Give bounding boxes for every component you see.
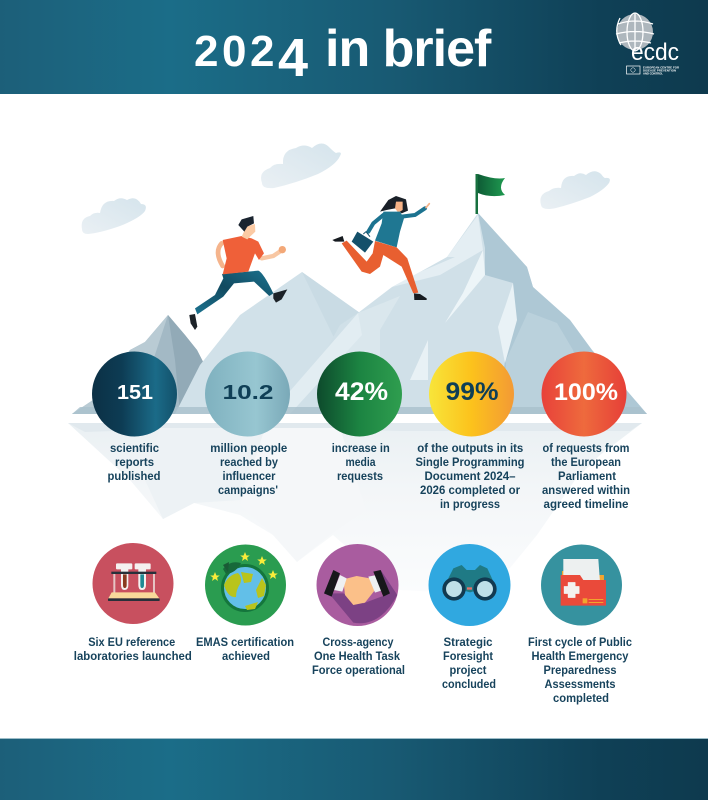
stat: 42% increase in media requests bbox=[317, 352, 402, 483]
mountain: main peak bbox=[270, 213, 647, 414]
caption bbox=[312, 637, 405, 677]
stat: 100% Parliament requests: 100% bbox=[554, 379, 618, 406]
icon: handshake bbox=[316, 544, 398, 626]
caption: Foresight bbox=[443, 651, 493, 663]
stat: 151 scientific reports published: published bbox=[108, 471, 160, 483]
stat: 100% Parliament requests: the European bbox=[551, 457, 621, 469]
stat: 99% outputs bbox=[416, 352, 524, 511]
caption: completed bbox=[553, 693, 609, 705]
achievement: Preparedness Assessments bbox=[528, 544, 633, 705]
ECDC logo bbox=[616, 13, 679, 76]
stat: 10.2 million people: 10.2 bbox=[222, 382, 274, 404]
stat: 99% outputs: in progress bbox=[440, 499, 500, 511]
caption: One Health Task bbox=[314, 651, 401, 663]
achievement: One Health Task Force bbox=[312, 544, 405, 677]
flag bbox=[476, 174, 505, 214]
stat: 99% outputs: of the outputs in its bbox=[417, 443, 523, 455]
ground shadow line bbox=[72, 407, 647, 414]
stat: 10.2 million people: million people bbox=[210, 443, 287, 455]
caption: Assessments bbox=[544, 679, 616, 691]
title: 202 bbox=[194, 27, 278, 76]
achievement: EMAS certification bbox=[196, 544, 294, 663]
stat: 10.2 million people: influencer bbox=[222, 471, 276, 483]
stat: 10.2 million people: reached by bbox=[220, 457, 279, 469]
stat: 151 scientific reports published: reports bbox=[115, 457, 154, 469]
stat: 100% Parliament requests: agreed timeline bbox=[544, 499, 628, 511]
caption: Cross-agency bbox=[322, 637, 394, 649]
ECDC logo: DISEASE PREVENTION bbox=[643, 68, 676, 72]
mountain: middle peak bbox=[175, 272, 400, 414]
stat: 99% outputs: 99% bbox=[446, 378, 498, 406]
stat: 100% Parliament requests: answered within bbox=[542, 485, 630, 497]
caption bbox=[528, 637, 633, 705]
stat: 42% increase in media requests: requests bbox=[337, 471, 383, 483]
caption: Strategic bbox=[444, 637, 493, 649]
cloud: right bbox=[540, 171, 610, 209]
icon: medical folder bbox=[541, 544, 622, 626]
header band bbox=[0, 0, 708, 94]
stat: 151 scientific reports published: 151 bbox=[117, 382, 153, 404]
stat: 99% outputs: Document 2024– bbox=[424, 471, 516, 483]
icon: globe with stars bbox=[205, 544, 286, 626]
icon: test tubes bbox=[92, 543, 174, 624]
stat: 42% increase in media requests: media bbox=[346, 457, 376, 469]
caption: laboratories launched bbox=[74, 651, 192, 663]
stat: 10.2 million people: campaigns' bbox=[218, 485, 278, 497]
caption bbox=[442, 637, 496, 691]
caption: project bbox=[450, 665, 487, 677]
title: in brief bbox=[325, 20, 492, 78]
ECDC logo: AND CONTROL bbox=[643, 72, 663, 76]
caption: achieved bbox=[222, 651, 270, 663]
cloud: left bbox=[82, 198, 146, 234]
ECDC logo: EUROPEAN CENTRE FOR bbox=[643, 66, 679, 70]
stat: 42% increase in media requests: increase in bbox=[332, 443, 390, 455]
caption: concluded bbox=[442, 679, 496, 691]
caption: Preparedness bbox=[544, 665, 616, 677]
stat: 99% outputs: Single Programming bbox=[416, 457, 524, 469]
achievement: Strategic Foresight bbox=[428, 544, 510, 691]
stat: 151 scientific reports published: scientific bbox=[110, 443, 160, 455]
caption bbox=[196, 637, 294, 663]
icon: binoculars bbox=[428, 544, 510, 626]
cloud: centre bbox=[261, 144, 341, 188]
caption: First cycle of Public bbox=[528, 637, 633, 649]
mountain reflection bbox=[68, 423, 642, 592]
caption: Health Emergency bbox=[532, 651, 629, 663]
mountain: small left peak bbox=[72, 315, 232, 414]
caption: EMAS certification bbox=[196, 637, 294, 649]
stat: 100% Parliament requests bbox=[542, 352, 630, 511]
stat: 99% outputs: 2026 completed or bbox=[420, 485, 521, 497]
stat: 10.2 million people bbox=[205, 352, 290, 497]
mountains bbox=[72, 213, 647, 414]
runner: man bbox=[189, 216, 287, 330]
caption: Force operational bbox=[312, 665, 405, 677]
title: 4 bbox=[278, 28, 323, 88]
stat: 100% Parliament requests: of requests from bbox=[542, 443, 630, 455]
footer band bbox=[0, 738, 708, 800]
ECDC logo: ecdc bbox=[631, 39, 679, 66]
caption bbox=[74, 637, 192, 663]
runner: woman bbox=[332, 196, 429, 300]
stat: 151 scientific reports published bbox=[92, 352, 177, 483]
caption: Six EU reference bbox=[88, 637, 175, 649]
stat: 100% Parliament requests: Parliament bbox=[558, 471, 616, 483]
stat: 42% increase in media requests: 42% bbox=[335, 378, 388, 406]
achievement: reference laboratories bbox=[74, 543, 192, 663]
